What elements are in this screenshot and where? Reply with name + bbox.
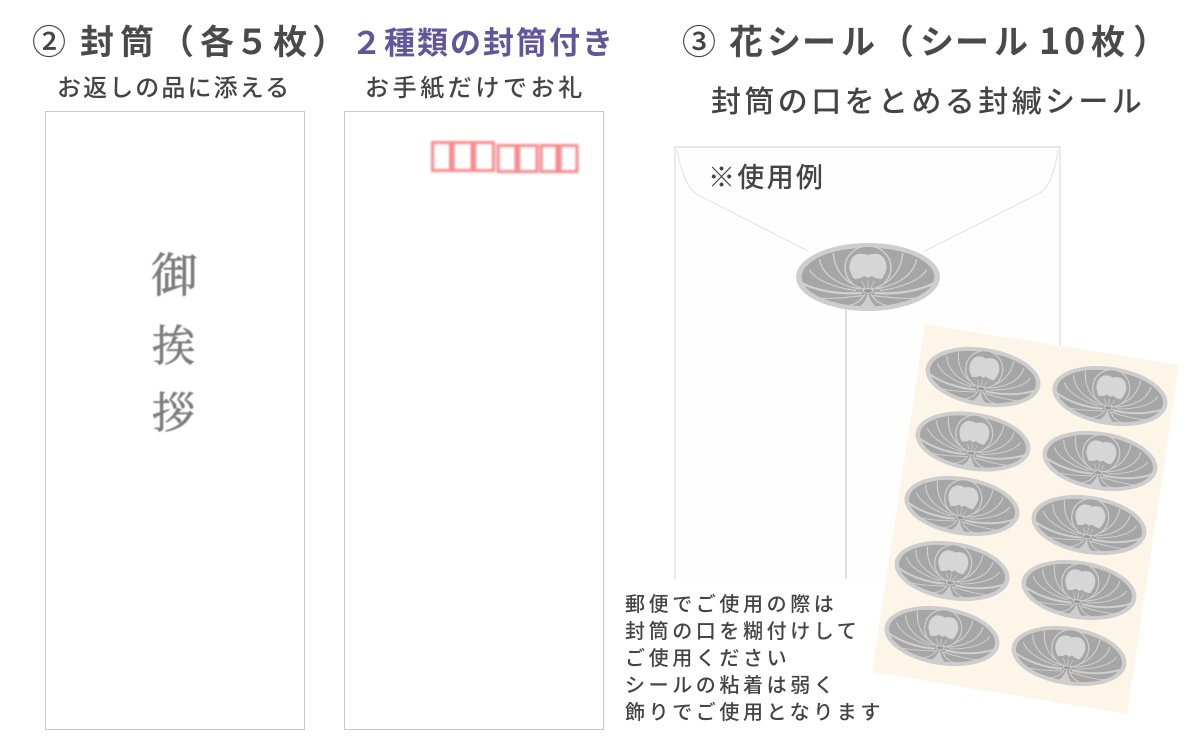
seal: row 3 left: [900, 468, 1024, 544]
heading: section 2 envelopes: 封筒（各５枚）: [80, 24, 346, 62]
seal: row 4 left: [890, 533, 1014, 609]
heading: two envelope types: ２種類の封筒付き: [351, 26, 613, 61]
subheading: for return gifts: お返しの品に添える: [57, 75, 291, 102]
subheading: thank-you by letter: お手紙だけでお礼: [365, 75, 586, 102]
seal: row 1 right: [1048, 358, 1172, 434]
panel: vertical envelope with greeting: [46, 112, 304, 730]
note: postal usage advice: [625, 593, 884, 724]
heading: section 3 flower seals: 花シール（シール: [729, 24, 1028, 62]
heading: section 3 flower seals: [682, 13, 1167, 65]
note: postal usage advice: ご使用ください: [625, 647, 790, 670]
heading: section 3 flower seals: 10: [1039, 13, 1085, 65]
envelope greeting text: [151, 239, 198, 441]
note: postal usage advice: シールの粘着は弱く: [625, 674, 837, 697]
seal: row 4 right: [1017, 552, 1141, 628]
envelope greeting text: 御: [151, 239, 198, 306]
seal on envelope: [796, 243, 940, 311]
panel: envelope usage example: [675, 147, 1060, 579]
note: postal usage advice: 飾りでご使用となります: [625, 701, 884, 724]
envelope greeting text: 拶: [152, 380, 197, 441]
seal: row 3 right: [1027, 487, 1151, 563]
panel: letter envelope with postal code boxes: [344, 112, 604, 730]
note: postal usage advice: 郵便でご使用の際は: [625, 593, 837, 616]
postal code boxes: [432, 142, 577, 172]
seal: row 5 right: [1007, 618, 1131, 694]
note: postal usage advice: 封筒の口を糊付けして: [625, 620, 860, 643]
envelope greeting text: 挨: [152, 313, 196, 374]
seal: row 2 right: [1038, 423, 1162, 499]
usage example label: ※使用例: [708, 163, 825, 193]
panel: seal sheet: [872, 324, 1179, 714]
heading: section 2 envelopes: ②: [32, 24, 66, 62]
seal: row 2 left: [911, 404, 1035, 479]
heading: section 3 flower seals: ③: [682, 24, 716, 62]
subheading: sealing stickers: 封筒の口をとめる封緘シール: [711, 86, 1145, 119]
seal: row 1 left: [921, 339, 1045, 415]
heading: section 3 flower seals: 枚）: [1091, 24, 1167, 62]
seal: row 5 left: [880, 598, 1004, 674]
